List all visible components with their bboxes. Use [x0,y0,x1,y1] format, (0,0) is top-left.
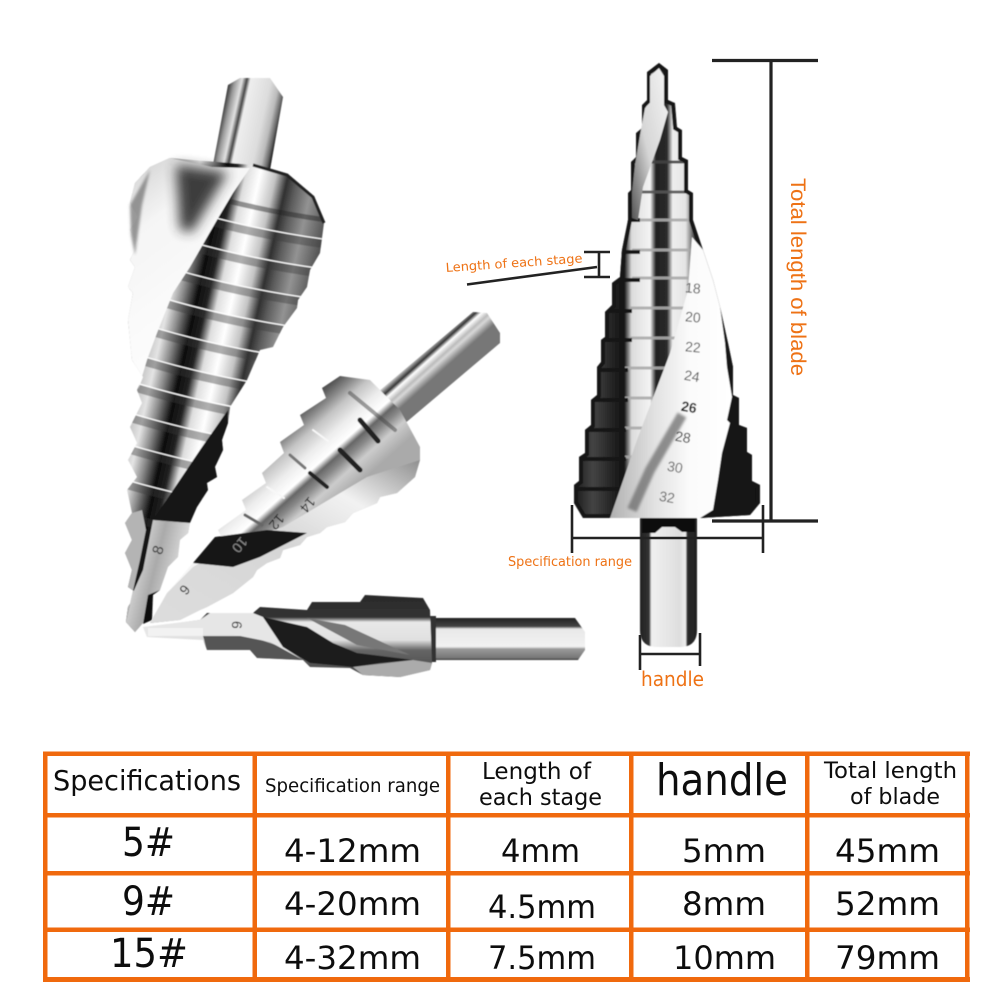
scale number 14 on bit 2: 14 [297,494,319,516]
dark spiral band of bit 3 [263,617,413,667]
flute shadow of bit 4 [632,415,682,510]
lower bright flute and tip of bit 1 [126,520,190,632]
table row 9#: 8mm [682,885,766,923]
table row 5#: 5mm [682,832,766,870]
scale numbers of bit 4: 24 [683,367,701,385]
scale numbers of bit 4: 32 [658,488,676,506]
scale numbers of bit 4: 28 [674,428,692,446]
scale numbers of bit 4: 18 [685,279,702,297]
table header row: Specifications [53,764,241,797]
table row 5#: 4mm [501,832,580,870]
label: total length of blade: Total length of blade [786,178,809,376]
stepped cone body of bit 1 [125,158,324,632]
hex shank of bit 3 [430,618,585,660]
table row 9#: 52mm [835,885,940,923]
table row 15#: 79mm [835,939,940,977]
table row 15#: 4-32mm [284,939,421,977]
table row 9# [122,879,940,926]
step rings of bit 1 [127,200,322,528]
shank of bit 1 [212,78,283,170]
stepped cone body of bit 4 [574,63,760,518]
scale numbers of bit 4: 22 [685,338,702,356]
table row 9#: 4-20mm [284,885,421,923]
stepped cone body of bit 2 [150,376,420,623]
scale number 8 on bit 1: 8 [149,544,168,557]
label: specification range: Specification range [508,555,632,570]
specifications table [43,752,970,982]
bright flute of bit 2 [150,460,420,623]
lower bright flute of bit 4 [610,237,732,518]
scale number 6 on bit 2: 6 [176,582,194,598]
step lines of bit 4 [624,160,688,460]
dark stepped shadow of bit 4 [570,220,640,489]
table header row: Length of [482,759,592,785]
drill bit 3: small horizontal step bit [143,595,585,677]
table header row: handle [656,755,788,806]
shank chamfer of bit 4 [642,518,695,533]
dimension: total length of blade [712,60,818,521]
table row 15#: 15# [110,931,188,977]
drill bit 1: large tilted step bit [124,77,326,632]
stepped body of bit 3 [143,595,432,677]
grey spiral strip of bit 3 [307,618,410,655]
table row 5#: 5# [122,820,175,866]
table row 5#: 4-12mm [284,832,421,870]
scale numbers of bit 4: 26 [680,398,698,416]
brushed lower flute of bit 3 [353,660,432,677]
table row 15#: 10mm [673,939,776,977]
table row 5#: 45mm [835,832,940,870]
step rings of bit 2 [245,393,395,525]
table row 9#: 9# [122,879,175,925]
table header row [53,755,957,811]
flute teeth shade of bit 1 [130,170,150,255]
drill bit 2: medium angled step bit [150,312,500,623]
table header row: Total length [823,759,957,784]
upper twisted flute of bit 4 [632,68,668,220]
dark edge outline of bit 4 [574,63,760,518]
lower step shade of bit 3 [203,636,303,660]
drill bit 4: annotated upright step bit [570,63,760,647]
bright flute of bit 3 [192,612,302,660]
hex shank of bit 4 [640,518,697,647]
lower dark flute of bit 1 [153,410,228,523]
table grid [43,752,970,982]
table row 5# [122,820,940,870]
dark flute patch of bit 2 [193,530,307,567]
table row 15#: 7.5mm [488,939,596,977]
dimension: specification range [572,505,763,553]
label: length of each stage: Length of each stage [445,250,583,275]
table header row: of blade [850,785,940,810]
scale number 12 on bit 2: 12 [266,511,288,533]
shank of bit 2 [378,312,500,425]
upper flute of bit 1 [128,158,250,390]
dimension: length of each stage [467,252,610,284]
shank neck of bit 3 [429,616,436,662]
table row 15# [110,931,940,977]
lower-left steel highlight of bit 1 [125,510,146,622]
tip shadow of bit 1 [143,590,160,624]
scale numbers of bit 4: 30 [666,458,684,476]
dimension: handle [640,633,700,670]
table header row: Specification range [265,775,440,797]
table row 9#: 4.5mm [488,888,596,926]
shoulder rim of bit 1 [253,165,324,223]
table header row: each stage [479,785,602,811]
scale numbers of bit 4 [658,279,702,506]
label: handle: handle [641,667,704,691]
flute shadow of bit 1 [176,165,228,232]
scale number 10 on bit 2: 10 [229,534,251,556]
tip highlight of bit 3 [148,628,203,636]
scale number 6 on bit 3: 6 [229,620,245,630]
scale numbers of bit 4: 20 [685,308,702,326]
